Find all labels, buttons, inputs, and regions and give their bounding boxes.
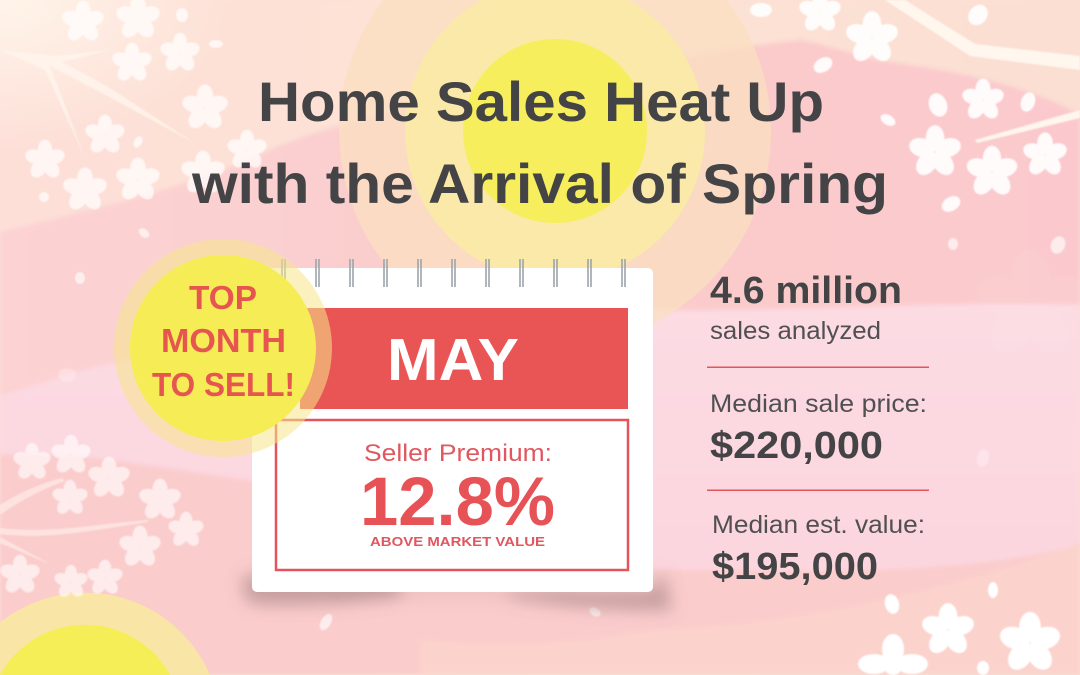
spiral binding	[282, 259, 625, 287]
title	[191, 70, 888, 215]
badge: top month to sell: MONTH	[161, 322, 286, 359]
stat: median est. value: Median est. value:	[712, 511, 925, 539]
bottom-left sun	[0, 593, 210, 675]
upper-left blossoms	[23, 0, 269, 213]
badge: top month to sell: TO SELL!	[152, 366, 295, 403]
calendar	[243, 259, 672, 610]
calendar shadow	[243, 572, 672, 610]
seller premium box: Seller Premium:	[364, 440, 552, 467]
stat: median sale price	[710, 390, 927, 467]
stat: sales analyzed	[710, 270, 902, 345]
badge: top month to sell: TOP	[189, 279, 257, 316]
title: with the Arrival of Spring	[191, 152, 888, 215]
stat: median est. value: $195,000	[712, 546, 878, 588]
faint large blossom	[971, 249, 1080, 362]
stat: sales analyzed: sales analyzed	[710, 317, 881, 345]
seller premium box: ABOVE MARKET VALUE	[370, 535, 545, 549]
lower-right blossoms	[858, 582, 1063, 675]
calendar page	[252, 268, 653, 592]
stat: median est. value	[712, 511, 925, 588]
top sun	[339, 0, 771, 347]
title: Home Sales Heat Up	[258, 70, 824, 133]
scattered petals	[58, 226, 1068, 632]
badge: top month to sell	[114, 239, 332, 457]
stat: median sale price: Median sale price:	[710, 390, 927, 418]
seller premium box: 12.8%	[360, 463, 555, 540]
month header: MAY	[387, 327, 519, 393]
lower-left blossoms	[0, 435, 205, 599]
stat: median sale price: $220,000	[710, 425, 883, 467]
month header	[300, 308, 628, 409]
stat: sales analyzed: 4.6 million	[710, 270, 902, 312]
seller premium box	[276, 420, 628, 570]
upper-right blossoms	[750, 0, 1069, 215]
